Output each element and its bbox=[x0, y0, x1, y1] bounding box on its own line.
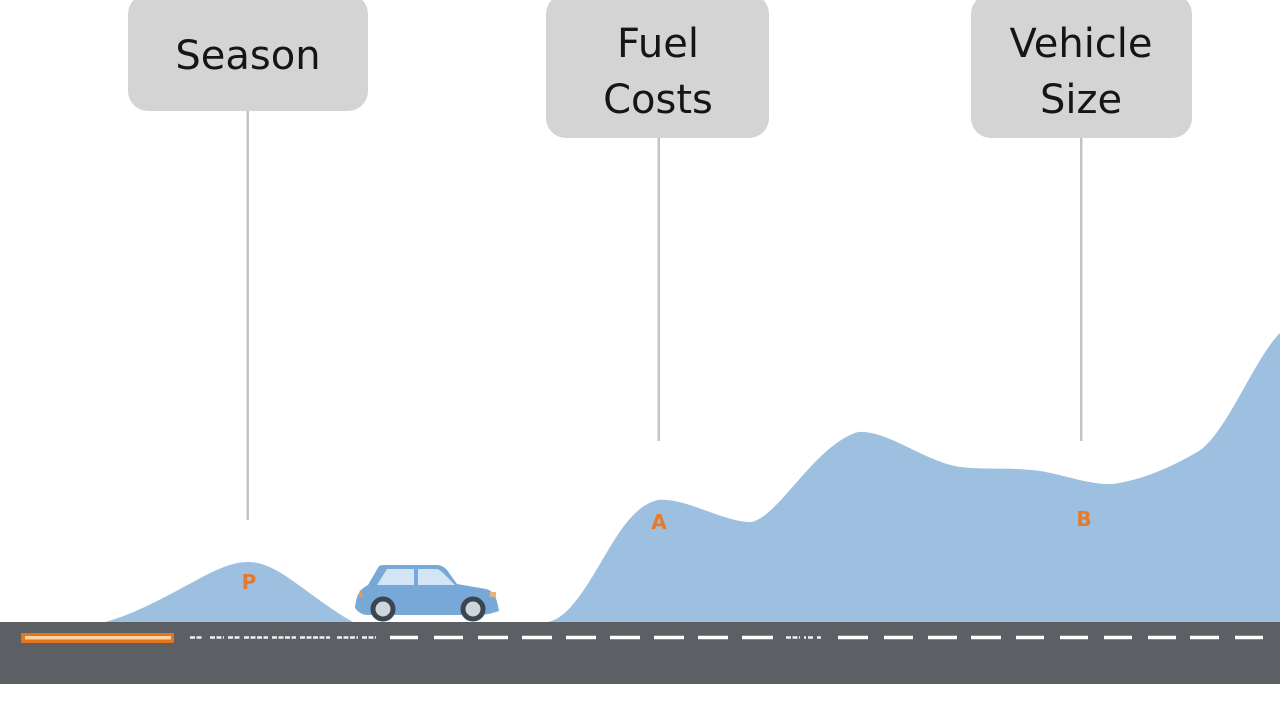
hill letter: A: A bbox=[651, 510, 667, 534]
connector: fuel costs bbox=[658, 136, 660, 441]
hills: fuel costs and vehicle size bbox=[548, 333, 1280, 622]
label text: vehicle size: Size bbox=[1040, 77, 1122, 123]
label text: fuel costs: Costs bbox=[603, 77, 713, 123]
white road dashes bbox=[390, 636, 1263, 639]
car body bbox=[355, 565, 499, 615]
label box: vehicle size bbox=[971, 0, 1192, 138]
connector: vehicle size bbox=[1080, 136, 1082, 441]
label text: fuel costs: Fuel bbox=[617, 21, 699, 67]
label box: fuel costs bbox=[546, 0, 769, 138]
small road dashes bbox=[190, 636, 821, 639]
hill letter: B: B bbox=[1076, 507, 1092, 531]
label text: vehicle size: Vehicle bbox=[1009, 21, 1153, 67]
label box: season bbox=[128, 0, 368, 111]
car wheels bbox=[373, 599, 393, 619]
connector: season bbox=[246, 110, 249, 520]
road bbox=[0, 622, 1280, 684]
car lights bbox=[359, 589, 363, 597]
hill letter: P: P bbox=[242, 570, 256, 594]
car windows bbox=[377, 569, 414, 585]
label text: season: Season bbox=[175, 33, 321, 79]
hill: season bbox=[105, 562, 353, 622]
orange road line bbox=[21, 633, 174, 643]
icon: car bbox=[355, 565, 499, 619]
